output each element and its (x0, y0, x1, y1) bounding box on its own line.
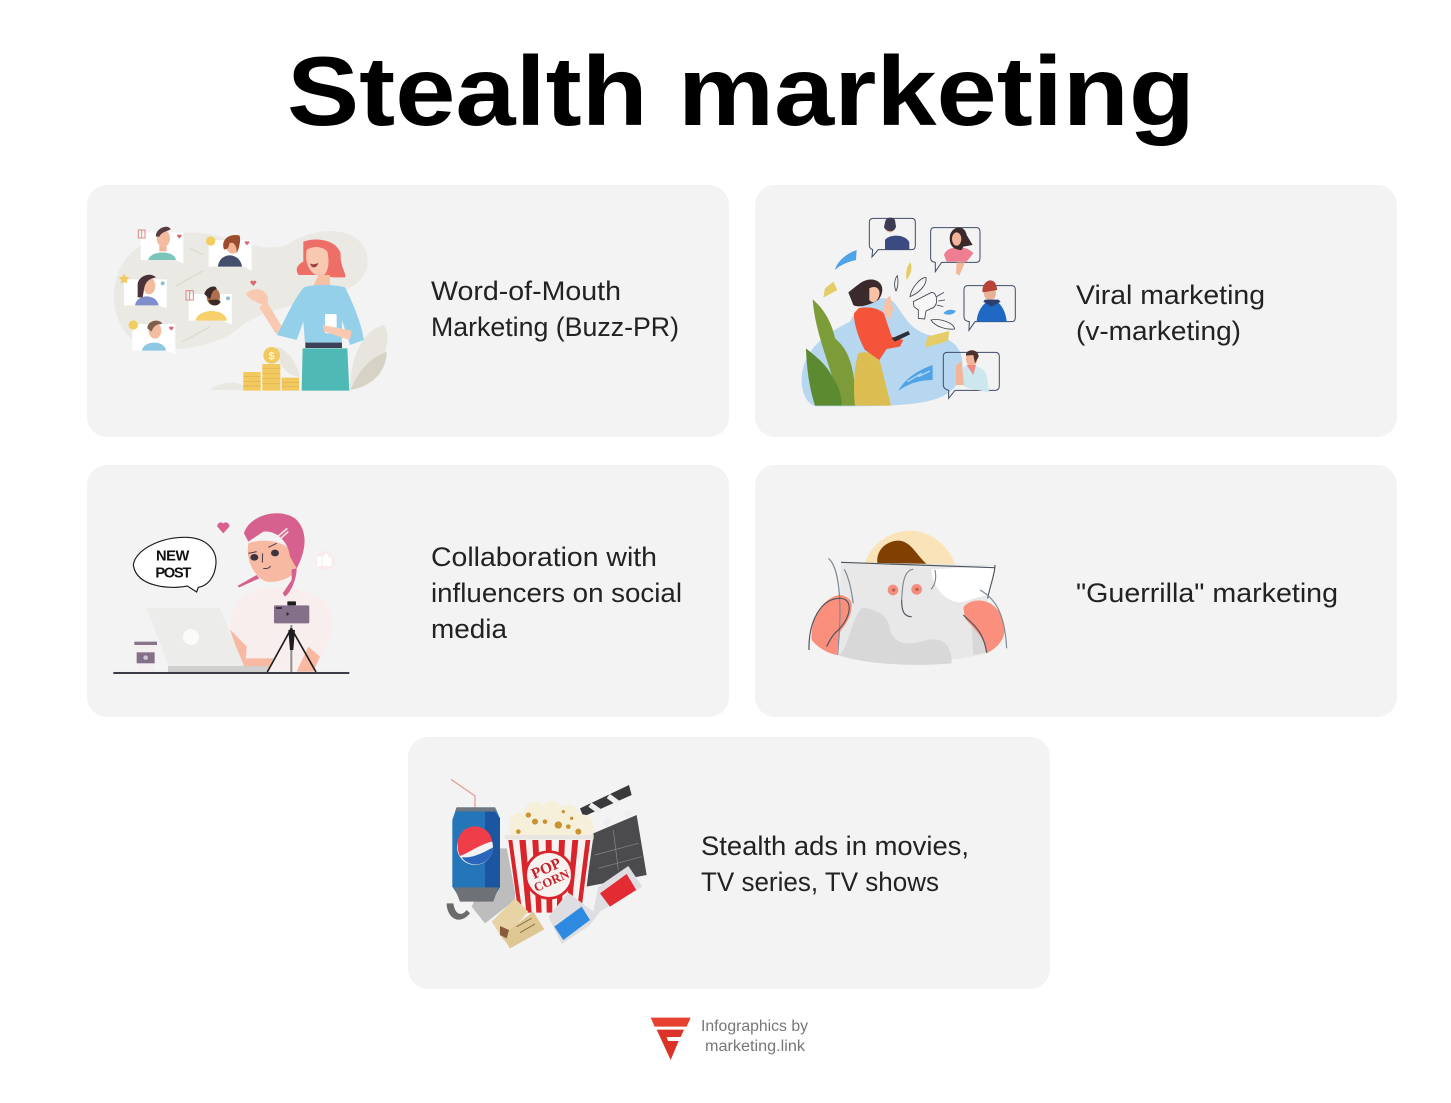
tripod with phone (267, 601, 316, 673)
popcorn bucket: CORN (532, 867, 571, 895)
leaves (210, 325, 387, 390)
coin stacks: $ (269, 350, 275, 362)
label: Viral marketing (1076, 280, 1265, 310)
panel: influencers (87, 465, 729, 717)
footer credit (651, 1018, 808, 1060)
label (431, 542, 682, 644)
tickets (492, 898, 544, 948)
woman (848, 279, 910, 406)
panel: guerrilla marketing (755, 465, 1397, 717)
coin stacks (243, 347, 299, 391)
laptop (147, 608, 268, 673)
title: Stealth marketing (287, 36, 1195, 146)
card 1 (138, 227, 183, 263)
card 2 (206, 235, 252, 271)
person 4 (956, 350, 989, 392)
3D glasses (548, 866, 642, 944)
eyes (888, 584, 922, 595)
credit text (701, 1018, 808, 1055)
label: media (431, 614, 507, 644)
panel: word-of-mouth marketing (87, 185, 729, 437)
panel: viral marketing (755, 185, 1397, 437)
person 2 (944, 227, 973, 276)
megaphone doodle (895, 276, 955, 329)
card 5 (129, 320, 175, 355)
credit text: marketing.link (705, 1038, 805, 1055)
label: TV series, TV shows (701, 867, 939, 897)
label (1076, 280, 1265, 346)
label: "Guerrilla" marketing (1076, 578, 1338, 608)
straw (451, 779, 475, 808)
person 1 (884, 218, 909, 250)
card 3 (119, 274, 167, 309)
clapperboard (580, 785, 647, 887)
label: Word-of-Mouth (431, 276, 621, 306)
label (431, 276, 679, 342)
person 3 (977, 280, 1007, 322)
newspaper (838, 562, 995, 665)
icon: woman with people cards (114, 227, 387, 391)
speech bubble (133, 537, 216, 592)
film reel (447, 848, 515, 923)
label: Marketing (Buzz-PR) (431, 312, 679, 342)
feathers (823, 250, 956, 391)
card 4 (186, 287, 232, 325)
label: influencers on social (431, 578, 682, 608)
line art (809, 558, 1007, 655)
thumbs-up (315, 551, 335, 571)
popcorn bucket: POP (529, 855, 564, 883)
cup (134, 642, 157, 672)
heart (217, 522, 229, 533)
icon: person behind a newspaper (809, 531, 1007, 665)
label: (v-marketing) (1076, 316, 1241, 346)
icon: woman with phone and chat bubbles (802, 218, 1015, 406)
shoulders (812, 595, 1004, 655)
speech bubble: POST (155, 565, 191, 581)
panel: stealth ads (408, 737, 1050, 989)
label (701, 831, 969, 897)
speech bubble: NEW (156, 549, 189, 565)
popcorn bucket (504, 801, 594, 913)
credit text: Infographics by (701, 1018, 808, 1035)
table line (113, 672, 349, 674)
icon: marketing.link logo (651, 1018, 691, 1060)
woman (246, 239, 364, 391)
soda can (452, 807, 500, 902)
sun and hair (864, 531, 956, 569)
label: Stealth ads in movies, (701, 831, 969, 861)
bubble top (869, 218, 1015, 398)
icon: soda, popcorn, clapperboard, tickets and 3D glasses (447, 779, 647, 948)
body (230, 513, 333, 672)
icon: influencer at laptop (113, 513, 349, 674)
label: Collaboration with (431, 542, 657, 572)
